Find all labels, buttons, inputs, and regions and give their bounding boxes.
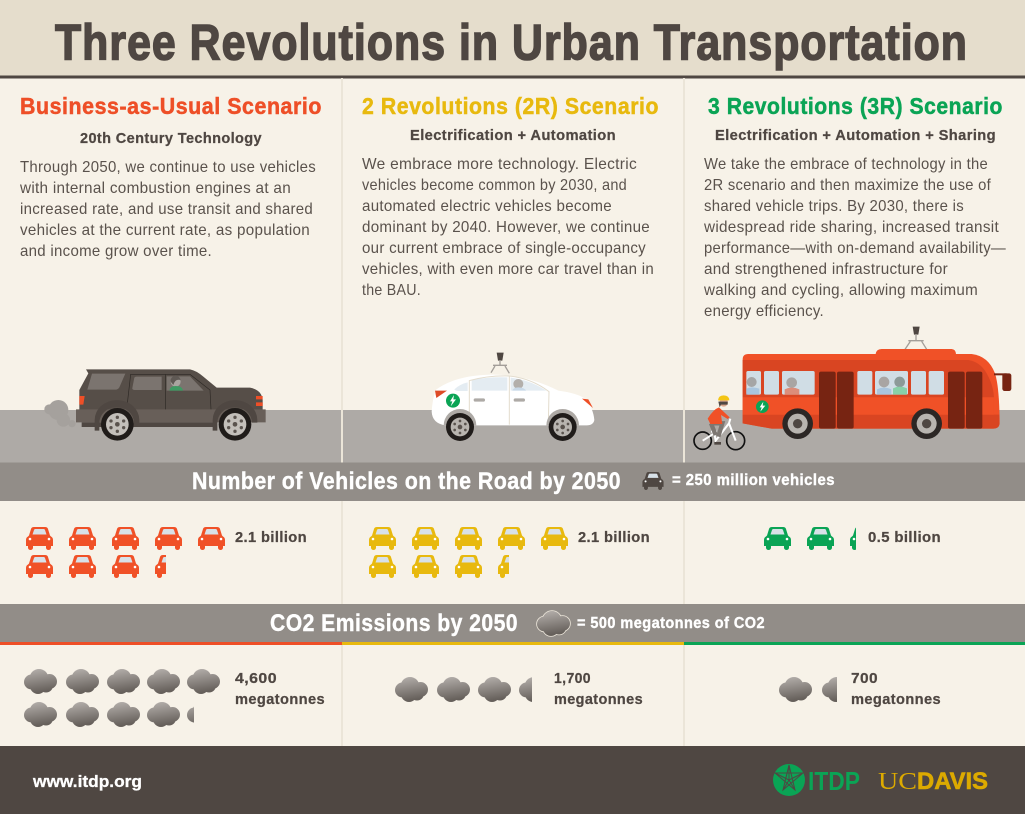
section band: number of vehicles: Number of Vehicles on the Road by 2050: [192, 468, 621, 495]
panel: 3 revolutions scenario text: widespread ride sharing, increased transit: [703, 219, 999, 236]
section band: CO2 emissions: CO2 Emissions by 2050: [270, 610, 518, 637]
label: 3R vehicles: 0.5 billion: [868, 529, 941, 546]
panel: business-as-usual scenario text: with internal combustion engines at an: [19, 180, 291, 197]
logo: ITDP: [773, 764, 860, 796]
pictogram: 3R vehicles: [764, 527, 856, 550]
logo: UC Davis: DAVIS: [917, 768, 988, 795]
illustration: dark SUV with exhaust: [44, 369, 266, 441]
section band: CO2 emissions: [0, 604, 1025, 645]
label: BAU vehicles: 2.1 billion: [235, 529, 307, 546]
panel: business-as-usual scenario text: Business-as-Usual Scenario: [20, 93, 322, 119]
panel: business-as-usual scenario text: vehicles at the current rate, as population: [20, 222, 310, 239]
label: 3R emissions: megatonnes: [851, 691, 941, 708]
illustration: white autonomous electric car: [432, 353, 594, 441]
logo: UC Davis: UC: [878, 769, 917, 795]
icon: cloud key: [537, 611, 570, 636]
logo: UC Davis: [878, 768, 988, 795]
pictogram: 3R emissions: [779, 677, 837, 702]
panel: 2 revolutions scenario text: We embrace more technology. Electric: [362, 156, 637, 173]
panel: 3 revolutions scenario text: walking and cycling, allowing maximum: [703, 282, 978, 299]
label: 2R emissions: megatonnes: [554, 691, 643, 708]
panel: 2 revolutions scenario text: the BAU.: [362, 282, 421, 299]
panel: 2 revolutions scenario text: dominant by 2040. However, we continue: [362, 219, 650, 236]
panel: business-as-usual scenario text: increased rate, and use transit and shared: [20, 201, 313, 218]
pictogram: BAU vehicles: [26, 527, 225, 578]
road: [0, 410, 1025, 463]
icon: vehicle key: [642, 472, 664, 490]
panel: business-as-usual scenario text: Through 2050, we continue to use vehicles: [20, 159, 316, 176]
section band: number of vehicles: = 250 million vehicles: [672, 472, 835, 489]
panel: 3 revolutions scenario text: 3 Revolutions (3R) Scenario: [708, 93, 1003, 119]
panel: 3 revolutions scenario text: We take the embrace of technology in the: [704, 156, 988, 173]
panel: 2 revolutions scenario text: 2 Revolutions (2R) Scenario: [362, 93, 659, 119]
panel: 3 revolutions scenario text: Electrification + Automation + Sharing: [715, 127, 996, 144]
label: 3R emissions: 700: [851, 670, 878, 687]
panel: 3 revolutions scenario text: [703, 93, 1006, 320]
pictogram: 2R emissions: [395, 677, 532, 702]
panel: 2 revolutions scenario text: vehicles, with even more car travel than in: [362, 261, 654, 278]
section band: number of vehicles: [0, 462, 1025, 501]
panel: 2 revolutions scenario text: [362, 93, 659, 299]
panel: 3 revolutions scenario text: performance—with on-demand availability—: [704, 240, 1006, 257]
label: 2R emissions: 1,700: [554, 670, 591, 687]
panel: business-as-usual scenario text: 20th Century Technology: [80, 130, 262, 147]
pictogram: BAU emissions: [24, 669, 220, 727]
footer: www.itdp.org: [32, 772, 142, 791]
label: 2R emissions: [554, 670, 643, 708]
section band: CO2 emissions: = 500 megatonnes of CO2: [577, 615, 765, 632]
panel: business-as-usual scenario text: [19, 93, 322, 260]
panel: 2 revolutions scenario text: our current embrace of single-occupancy: [362, 240, 646, 257]
panel: 2 revolutions scenario text: automated electric vehicles become: [362, 198, 612, 215]
panel: business-as-usual scenario text: and income grow over time.: [20, 243, 212, 260]
label: 2R vehicles: 2.1 billion: [578, 529, 650, 546]
label: BAU emissions: 4,600: [235, 670, 277, 687]
panel: 3 revolutions scenario text: 2R scenario and then maximize the use of: [704, 177, 991, 194]
panel: 2 revolutions scenario text: Electrification + Automation: [410, 127, 616, 144]
pictogram: 2R vehicles: [369, 527, 568, 578]
label: BAU emissions: [235, 670, 325, 708]
panel: 3 revolutions scenario text: energy efficiency.: [704, 303, 824, 320]
label: BAU emissions: megatonnes: [235, 691, 325, 708]
footer: [0, 746, 1025, 814]
panel: 3 revolutions scenario text: shared vehicle trips. By 2030, there is: [704, 198, 964, 215]
logo: ITDP: ITDP: [808, 766, 860, 796]
panel: 3 revolutions scenario text: and strengthened infrastructure for: [704, 261, 948, 278]
label: 3R emissions: [851, 670, 941, 708]
illustration: red electric bus with cyclist: [694, 327, 1011, 450]
title banner: [0, 0, 1025, 78]
panel: 2 revolutions scenario text: vehicles become common by 2030, and: [362, 177, 627, 194]
